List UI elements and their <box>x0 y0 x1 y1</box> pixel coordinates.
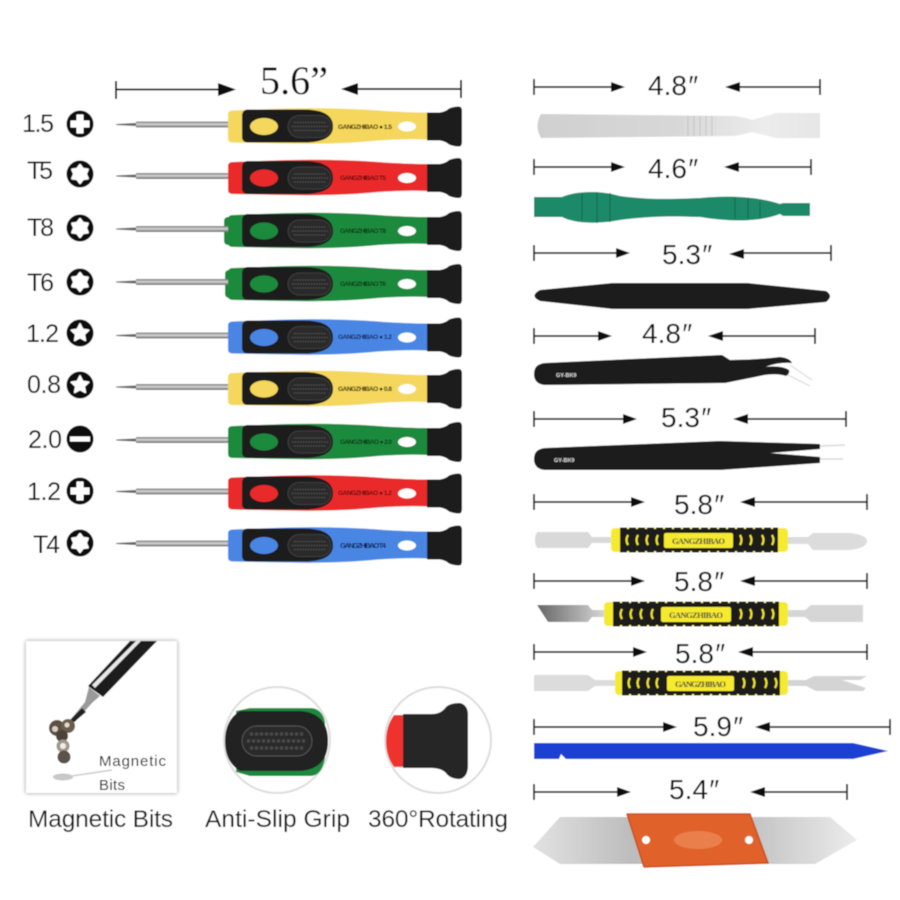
tool: black pry bar <box>534 283 830 309</box>
dimension: 5.9 inches: 5.9″ <box>693 711 743 742</box>
screwdriver row: 1.2 star: 1.2 <box>26 320 59 348</box>
screwdriver row: T5 Torx: T5 <box>27 157 53 185</box>
dimension: 5.8 inches <box>534 566 867 597</box>
tool: double-ended spudger 1 <box>535 528 867 552</box>
dimension: 5.8 inches <box>534 489 867 520</box>
dimension: 4.8 inches: 4.8″ <box>642 318 692 349</box>
screwdriver row: T8 Torx <box>27 211 462 251</box>
screwdriver row: T4 Torx <box>33 526 462 566</box>
screwdriver row: T5 Torx: GANGZHIBAO T5 <box>340 175 386 182</box>
dimension: 5.8 inches <box>534 638 867 669</box>
screwdriver row: 1.5 Phillips: GANGZHIBAO ● 1.5 <box>338 124 392 131</box>
dimension: 4.8 inches <box>534 70 820 101</box>
screwdriver row: T6 Torx: GANGZHIBAO T6 <box>340 281 386 288</box>
caption: anti-slip grip: Anti-Slip Grip <box>205 806 350 833</box>
tool: orange handled opening blade <box>533 814 857 867</box>
dimension: 4.6 inches: 4.6″ <box>648 153 698 184</box>
icon: screwdriver tip with bits <box>49 641 157 780</box>
screwdriver row: 1.2 star: GANGZHIBAO ● 1.2 <box>338 334 392 341</box>
dimension: 5.8 inches: 5.8″ <box>674 566 724 597</box>
dimension: 5.4 inches <box>534 774 847 805</box>
screwdriver row: 1.5 Phillips: 1.5 <box>22 110 54 138</box>
screwdriver row: 0.8 star <box>27 369 462 409</box>
tool: green spudger <box>534 192 810 223</box>
dimension: 4.6 inches <box>534 153 811 184</box>
dimension: screwdrivers 5.6 inches: 5.6” <box>260 58 328 103</box>
caption: 360 rotating: 360°Rotating <box>368 806 508 833</box>
screwdriver row: T8 Torx: T8 <box>27 214 54 242</box>
screwdriver row: T5 Torx <box>27 157 462 198</box>
dimension: 5.4 inches: 5.4″ <box>669 774 719 805</box>
screwdriver row: 2.0 slotted <box>28 422 462 462</box>
tool: straight tweezers <box>534 441 845 470</box>
screwdriver row: 2.0 slotted: GANGZHIBAO ● 2.0 <box>340 439 392 446</box>
caption: magnetic bits: Magnetic Bits <box>28 806 173 833</box>
dimension: 4.8 inches <box>534 318 815 349</box>
panel: magnetic bits photo <box>25 640 178 794</box>
circle: anti-slip grip detail <box>224 687 330 793</box>
text: bits annotation: Bits <box>99 777 125 794</box>
dimension: screwdrivers 5.6 inches <box>116 58 461 103</box>
dimension: 5.8 inches: 5.8″ <box>674 489 724 520</box>
screwdriver row: T4 Torx: T4 <box>33 531 60 559</box>
screwdriver row: 1.5 Phillips <box>22 106 462 146</box>
dimension: 5.9 inches <box>534 711 890 742</box>
screwdriver row: 1.2 Phillips: 1.2 <box>27 478 61 506</box>
tool: curved tweezers: GY-BK9 <box>556 373 576 379</box>
screwdriver row: 2.0 slotted: 2.0 <box>28 426 62 454</box>
screwdriver row: T4 Torx: GANGZHIBAO T4 <box>340 541 387 550</box>
circle: rotating cap detail <box>385 687 491 793</box>
screwdriver row: T6 Torx <box>27 264 462 304</box>
text: magnetic bits annotation: Magnetic <box>99 753 166 770</box>
screwdriver row: 1.2 Phillips: GANGZHIBAO ● 1.2 <box>338 490 392 497</box>
tool: double-ended spudger 3 <box>534 671 867 695</box>
screwdriver row: T6 Torx: T6 <box>27 269 54 297</box>
screwdriver row: 1.2 star <box>26 318 462 358</box>
dimension: 5.3 inches <box>534 239 831 270</box>
tool: double-ended spudger 1: GANGZHIBAO <box>672 536 725 546</box>
tool: double-ended spudger 3: GANGZHIBAO <box>675 679 726 689</box>
tool: blue plastic pry <box>534 743 888 759</box>
tool: curved tweezers <box>534 355 812 386</box>
screwdriver row: T8 Torx: GANGZHIBAO T8 <box>340 228 386 235</box>
tool: double-ended spudger 2: GANGZHIBAO <box>669 610 723 620</box>
dimension: 5.3 inches: 5.3″ <box>662 239 712 270</box>
screwdriver row: 0.8 star: GANGZHIBAO ● 0.8 <box>338 386 392 393</box>
screwdriver row: 0.8 star: 0.8 <box>27 371 61 399</box>
tool: double-ended spudger 2 <box>537 602 863 626</box>
dimension: 5.8 inches: 5.8″ <box>675 638 725 669</box>
screwdriver row: 1.2 Phillips <box>27 474 462 514</box>
tool: straight tweezers: GY-BK9 <box>554 458 574 464</box>
dimension: 5.3 inches <box>534 402 846 433</box>
dimension: 5.3 inches: 5.3″ <box>661 402 711 433</box>
tool: metal spudger <box>538 113 820 138</box>
dimension: 4.8 inches: 4.8″ <box>648 70 698 101</box>
